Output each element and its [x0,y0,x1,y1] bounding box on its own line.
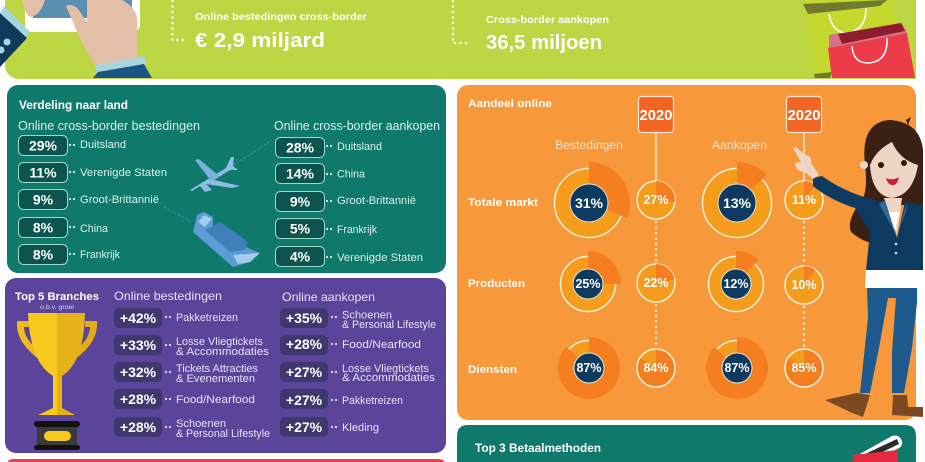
timeline: 2020 bestedingen: 2020 [640,108,672,124]
list: bestedingen per branche: +33% [120,337,157,353]
pie: diensten aankopen 2020 85% [785,349,823,387]
donut: producten aankopen 12%: 12% [723,277,749,291]
list: aankopen per branche: Food/Nearfood [342,339,421,351]
list: bestedingen per land: 8% [33,246,54,262]
icon: shopping bags [803,0,915,78]
timeline: 2020 bestedingen [638,96,674,346]
list: aankopen per branche: Schoenen [342,310,392,322]
list: bestedingen per branche: +28% [120,391,157,407]
pie: producten aankopen 2020 10%: 10% [791,278,817,292]
list: bestedingen per land: 8% [33,220,54,236]
row label: diensten: Diensten [468,364,517,376]
list: aankopen per land: Groot-Brittannië [337,195,416,207]
donut: diensten bestedingen 87%: 87% [576,361,602,375]
donut: diensten aankopen 87% [706,337,768,399]
list: bestedingen per branche: Pakketreizen [176,312,238,324]
donut: totale markt bestedingen 31% [554,162,630,238]
list: bestedingen per branche: Losse Vliegtickets [176,336,263,348]
list: aankopen per land [276,138,423,266]
icon: wallet with card [852,436,902,462]
list: aankopen per branche: +27% [286,364,323,380]
timeline: 2020 aankopen [786,96,822,346]
list: bestedingen per land: Groot-Brittannië [80,194,159,206]
value: 2,9 miljard: € 2,9 miljard [195,30,325,52]
donut: totale markt aankopen 13%: 13% [723,195,752,211]
subheading: aankopen: Online cross-border aankopen [274,119,440,133]
subheading: aankopen: Aankopen [712,140,767,152]
list: bestedingen per branche: Schoenen [176,418,226,430]
list: bestedingen per branche: & Evenementen [176,373,255,385]
donut: producten bestedingen 25%: 25% [575,277,601,291]
list: bestedingen per branche: Tickets Attracties [176,363,258,375]
list: aankopen per branche: +35% [286,310,323,326]
icon: trophy [17,313,97,450]
subheading: bestedingen: Bestedingen [555,140,623,152]
list: aankopen per land: 4% [290,248,311,264]
heading: verdeling naar land: Verdeling naar land [19,100,128,112]
label: online bestedingen: Online bestedingen cross-border [195,11,367,23]
list: bestedingen per branche: +28% [120,419,157,435]
list: bestedingen per branche: & Accommodaties [176,346,270,358]
list: aankopen per land: Verenigde Staten [337,252,423,264]
list: aankopen per land: China [337,168,366,180]
panel: aandeel online [457,85,916,420]
list: aankopen per branche: +27% [286,392,323,408]
illustration: woman pointing [793,117,923,417]
dotted connector right [453,1,469,43]
icon: hands holding tablet [0,0,152,78]
heading: top 5 branches: Top 5 Branches [15,291,99,303]
dotted connector left [172,1,188,40]
list: aankopen per branche [280,308,436,437]
donut: totale markt bestedingen 31%: 31% [575,195,604,211]
list: aankopen per land: 14% [286,166,315,182]
list: aankopen per land: Frankrijk [337,224,377,236]
pie: producten aankopen 2020 10% [785,266,823,304]
list: aankopen per branche: +27% [286,419,323,435]
list: aankopen per branche: Losse Vliegtickets [342,363,429,375]
donut: producten bestedingen 25% [560,251,621,312]
list: aankopen per land: Duitsland [337,141,382,153]
panel: top 5 branches [5,278,446,453]
list: aankopen per branche: & Accommodaties [342,372,436,384]
donut: diensten bestedingen 87% [558,337,620,399]
pie: totale markt aankopen 2020 11%: 11% [792,193,816,207]
row label: producten: Producten [468,278,525,290]
pie: totale markt bestedingen 2020 27% [637,181,675,219]
list: aankopen per branche: +28% [286,336,323,352]
subheading: online aankopen: Online aankopen [282,290,375,304]
pie: diensten bestedingen 2020 84%: 84% [643,361,669,375]
subheading: bestedingen: Online cross-border bestedingen [18,119,200,133]
list: bestedingen per branche: Food/Nearfood [176,394,255,406]
list: bestedingen per branche: +42% [120,310,157,326]
row label: totale markt: Totale markt [468,197,538,209]
icon: airplane [190,140,272,192]
pie: producten bestedingen 2020 22%: 22% [643,276,669,290]
subheading: online bestedingen: Online bestedingen [114,289,222,303]
pie: diensten aankopen 2020 85%: 85% [791,361,817,375]
list: aankopen per branche: & Personal Lifestyle [342,319,436,331]
list: bestedingen per land: 11% [29,164,57,180]
list: aankopen per branche: Kleding [342,422,379,434]
note: o.b.v. groei: o.b.v. groei [40,305,74,311]
list: aankopen per branche: Pakketreizen [342,395,403,407]
timeline: 2020 aankopen: 2020 [788,108,820,124]
pie: totale markt aankopen 2020 11% [785,181,823,219]
list: aankopen per land: 9% [290,194,311,210]
list: aankopen per land: 28% [286,140,315,156]
list: bestedingen per branche: +32% [120,364,157,380]
list: bestedingen per land: 29% [29,138,58,154]
pie: totale markt bestedingen 2020 27%: 27% [643,193,669,207]
pie: producten bestedingen 2020 22% [637,264,675,302]
heading: top 3 betaalmethoden: Top 3 Betaalmethoden [475,443,601,455]
value: 36,5 miljoen: 36,5 miljoen [486,32,602,54]
list: bestedingen per land [18,136,167,264]
list: bestedingen per land: Frankrijk [80,249,120,261]
heading: aandeel online: Aandeel online [468,98,552,110]
list: aankopen per land: 5% [290,220,311,236]
list: bestedingen per branche: & Personal Lifestyle [176,428,270,440]
list: bestedingen per land: Verenigde Staten [80,167,167,179]
pie: diensten bestedingen 2020 84% [637,349,675,387]
panel: top banner [0,0,916,79]
donut: totale markt aankopen 13% [702,162,772,238]
icon: container ship [164,207,260,267]
list: bestedingen per land: China [80,223,109,235]
list: bestedingen per land: 9% [33,192,54,208]
label: cross-border aankopen: Cross-border aankopen [486,14,609,26]
donut: diensten aankopen 87%: 87% [724,361,750,375]
panel: verdeling naar land [7,85,446,273]
donut: producten aankopen 12% [708,251,764,312]
panel: red strip [8,459,444,462]
panel: top 3 betaalmethoden [457,425,916,462]
list: bestedingen per land: Duitsland [80,139,126,151]
list: bestedingen per branche [114,308,270,440]
